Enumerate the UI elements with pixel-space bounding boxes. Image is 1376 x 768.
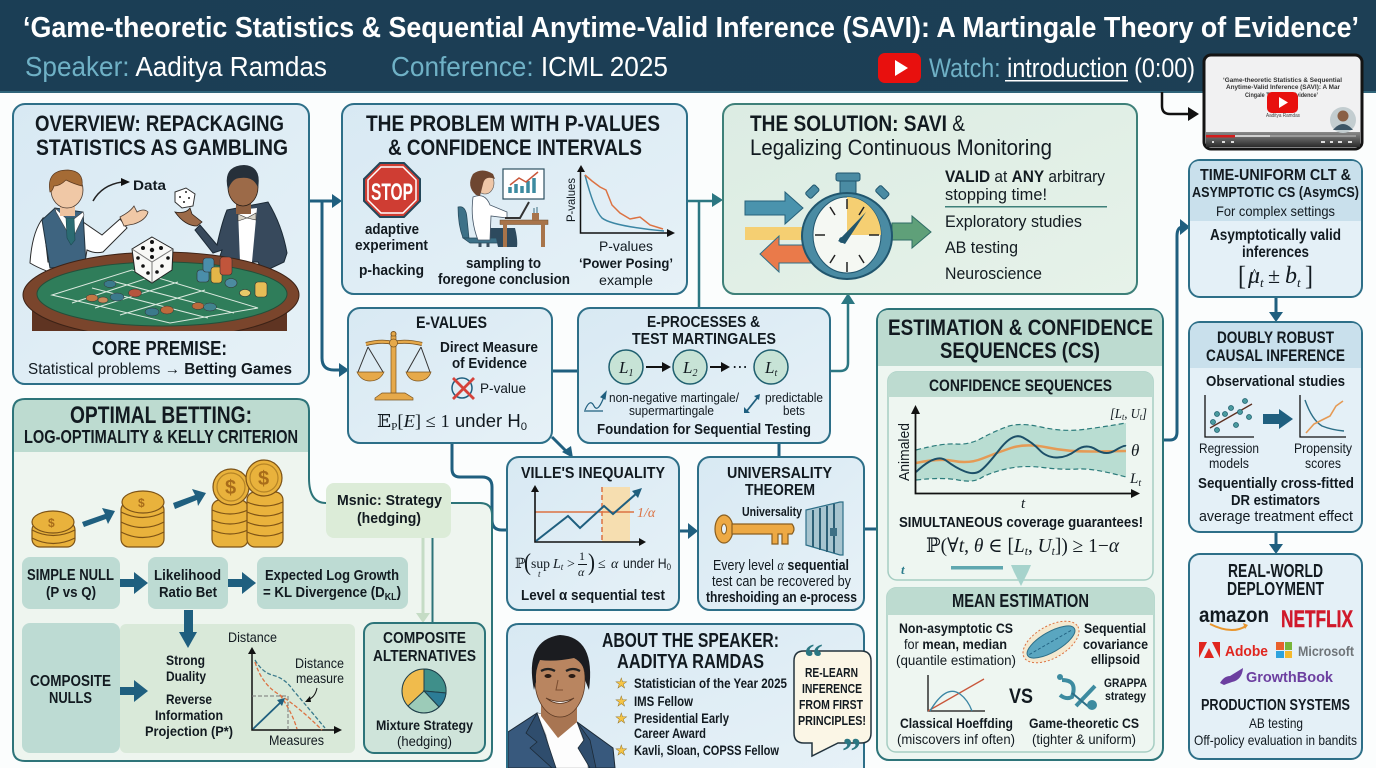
logo: growthbook: GrowthBook [1246,669,1334,686]
label: adaptive experiment: experiment [355,237,428,254]
box: composite alternatives: COMPOSITE [383,630,466,647]
callout: re-learn inference [794,637,871,768]
label: level alpha: Level α sequential test [521,587,665,604]
chart: confidence sequence: t [1138,478,1141,489]
heading: time-uniform: For complex settings [1216,203,1335,219]
formula: interval: ^ [1251,267,1258,283]
chart: propensity [1300,395,1346,437]
box: composite nulls [22,623,120,753]
arrow: to video thumbnail [1162,92,1199,121]
label: classical hoeffding: (miscovers inf often) [897,731,1015,747]
icon: stopwatch [802,173,892,279]
heading: universality [727,465,832,499]
heading: doubly robust: DOUBLY ROBUST [1217,328,1334,347]
panel: optimal betting [13,399,492,761]
connectors [309,193,1283,554]
awards list: Statistician of the Year 2025 [634,675,787,691]
chart: mixture pie [402,669,446,713]
label: grappa strategy [1104,676,1147,703]
label: propensity scores: scores [1305,455,1341,471]
heading: universality: UNIVERSALITY [727,465,832,482]
label: reverse information projection [145,691,233,739]
heading: overview: STATISTICS AS GAMBLING [36,135,288,160]
universality text: Every level α sequential [713,557,849,574]
label: foundation: Foundation for Sequential Testing [597,421,811,438]
formula: interval: ± [1268,263,1280,288]
box: composite nulls: COMPOSITE [30,673,111,690]
chart: reverse information projection: Distance [228,629,277,645]
heading: estimation [888,315,1153,363]
icon: jail gate [806,502,843,555]
universality text: threshoiding an e-process [706,589,857,606]
box: composite alternatives: Mixture Strategy [376,717,473,733]
small die [175,188,195,208]
logo: microsoft: Microsoft [1298,643,1354,659]
panel: e-processes [578,308,830,443]
icon: grappa tool [1057,674,1097,710]
heading: confidence sequences: CONFIDENCE SEQUENCES [929,376,1112,395]
icon: youtube [878,53,921,83]
panel: overview [13,104,309,384]
label: universality: Universality [742,504,803,519]
label: adaptive experiment [355,221,428,254]
icon: growing coin stacks: $ [138,496,145,510]
label: sampling to foregone conclusion: foregone conclusion [438,271,570,288]
panel: e-values [348,308,552,443]
heading: real-world: DEPLOYMENT [1227,579,1324,599]
label: p-hacking: p-hacking [359,262,424,279]
panel: time-uniform clt [1189,160,1362,297]
illustration: researcher at laptop [458,169,548,247]
subpanel: confidence sequences [888,372,1153,586]
video thumbnail: Anytime-Valid Inference (SAVI): A Mar [1226,84,1340,91]
icon: growing coin stacks: $ [225,477,236,499]
formula: e-value: 0 [521,421,527,433]
awards list: ★ [615,675,628,691]
label: dr estimators: average treatment effect [1199,508,1354,525]
video thumbnail: Aaditya Ramdas [1266,113,1300,119]
formula: interval: t [1260,275,1264,290]
heading: optimal betting [24,402,298,447]
formula: coverage: t [1025,544,1029,558]
betting table [23,252,299,338]
formula: interval [1238,261,1313,291]
chart: confidence sequence: t [1122,412,1125,422]
icon: arrows into stopwatch [745,192,931,272]
formula: e-value: [ [397,411,404,431]
heading: ville: VILLE'S INEQUALITY [521,465,665,482]
formula: ville: ≤ [598,557,606,572]
crossed out p-value: P-value [480,380,526,396]
label: power posing example: P-values [599,238,653,254]
label: game-theoretic cs: (tighter & uniform) [1032,731,1136,747]
awards list: ★ [615,742,628,758]
diagram: martingale chain: L [683,358,692,377]
label: non-asymptotic cs: (quantile estimation) [896,652,1016,668]
box: expected log growth: = KL Divergence (D [263,584,401,601]
man 2 [175,165,287,282]
heading: overview [35,111,288,160]
label: adaptive experiment: adaptive [365,221,419,238]
chart: reverse information projection [228,629,344,748]
label: non-negative martingale [609,390,739,418]
label: strong duality: Duality [166,668,206,684]
icon: stop sign: STOP [371,179,413,206]
solution text: stopping time! [945,185,1047,204]
logo: microsoft [1276,642,1354,659]
awards list: Career Award [634,725,706,741]
formula: interval: ] [1305,261,1313,291]
universality text [706,557,857,606]
speaker line: Speaker: Aaditya Ramdas [25,51,327,82]
heading: e-values: E-VALUES [416,313,487,332]
icon: covariance ellipsoid [1016,613,1086,671]
heading: real-world: REAL-WORLD [1228,561,1323,581]
formula: ville: > [567,557,575,572]
illustration: gamblers at betting table [23,165,299,338]
awards list: Kavli, Sloan, COPSS Fellow [634,742,779,758]
heading: about the speaker: ABOUT THE SPEAKER: [602,630,779,652]
arrow: regression to propensity [1263,409,1293,429]
label: direct measure of evidence [440,339,538,372]
panel: doubly robust causal inference [1189,322,1362,532]
label: dr estimators [1198,475,1354,525]
chart: reverse information projection: Distance [295,655,344,671]
label: game-theoretic cs: Game-theoretic CS [1029,715,1139,731]
icon: balance scales [357,332,431,400]
label: strong duality [166,652,206,684]
video thumbnail: ‘Game-theoretic Statistics & Sequential [1223,77,1342,84]
label: power posing example: example [599,272,653,288]
label: production systems: AB testing [1249,715,1303,731]
label: propensity scores: Propensity [1294,440,1352,456]
label: sequential covariance ellipsoid: Sequential [1084,620,1146,636]
core premise: Statistical problems → Betting Games [28,361,292,378]
heading: time-uniform: TIME-UNIFORM CLT & [1200,167,1351,184]
heading: problem: & CONFIDENCE INTERVALS [388,135,642,160]
diagram: martingale chain: 2 [692,368,697,379]
diagram: martingale chain: L [619,358,628,377]
label: classical hoeffding [897,715,1015,747]
header banner [0,0,1376,93]
heading: solution: THE SOLUTION: SAVI & [750,111,965,136]
formula: ville [515,549,671,579]
label: regression models [1199,440,1259,471]
chart: reverse information projection: Measures [269,732,324,748]
label: propensity scores [1294,440,1352,471]
solution text: Exploratory studies [945,212,1082,231]
box: expected log growth: Expected Log Growth [265,567,399,584]
formula: coverage: ℙ(∀t, θ ∈ [L [926,535,1025,557]
chart: confidence sequence: L [1130,471,1138,487]
heading: e-processes: TEST MARTINGALES [632,331,776,348]
arrow: likelihood to growth [228,572,256,594]
core premise [28,338,292,378]
box: composite alternatives [364,623,485,753]
portrait: speaker [508,635,615,768]
subpanel: mean estimation [887,588,1154,752]
awards list: ★ [615,710,628,726]
panel: the problem with p-values [342,104,687,294]
heading: solution [750,111,1052,160]
formula: ville: t [538,569,541,579]
diagram: martingale chain: ⋯ [732,359,748,376]
box: composite alternatives: (hedging) [397,733,452,749]
label: asymptotically valid: Asymptotically valid [1210,227,1341,244]
arrow: cs to mean estimation [1011,565,1031,586]
diagram: martingale chain: L [765,358,774,377]
box: likelihood ratio bet [148,557,228,609]
heading: universality: THEOREM [745,482,815,499]
logo: adobe: Adobe [1225,643,1268,660]
arrow: coin growth 1 [82,508,115,527]
heading: e-processes [632,314,776,348]
icon: key [715,515,794,544]
video thumbnail: Cingale Theory of Evidence’ [1245,92,1318,99]
chart: confidence sequence: Animaled [896,423,913,481]
chart: confidence sequence: [L [1110,407,1123,422]
label: strong duality: Strong [166,652,205,668]
callout: re-learn inference: RE-LEARN [805,665,858,680]
diagram: martingale chain: 1 [628,368,633,379]
heading: optimal betting: LOG-OPTIMALITY & KELLY CRITERION [24,427,298,447]
box: likelihood ratio bet: Ratio Bet [159,584,217,601]
heading: doubly robust [1206,328,1345,365]
universality text: test can be recovered by [712,573,851,590]
label: asymptotically valid: inferences [1242,244,1309,261]
icon: stop sign [364,163,420,217]
formula: coverage: ]) ≥ 1− [1055,535,1109,557]
panel: about the speaker [507,624,871,768]
arrow: composite nulls right [120,680,148,702]
chart: ville [531,485,656,546]
heading: problem: THE PROBLEM WITH P-VALUES [366,111,660,136]
label: vs: VS [1009,685,1033,708]
chart: p-values: P-values [564,178,578,222]
icon: predictable bets arrows [744,394,760,413]
box: expected log growth: ) [397,584,401,601]
label: sequential covariance ellipsoid: covariance [1083,636,1148,652]
label: classical hoeffding: Classical Hoeffding [900,715,1013,731]
label: sequential covariance ellipsoid: ellipsoid [1091,651,1140,667]
label: dr estimators: Sequentially cross-fitted [1198,475,1354,492]
man 1 [30,170,148,282]
chart: ville: 1/α [637,506,656,521]
chart: confidence sequence: θ [1131,441,1139,460]
heading: optimal betting: OPTIMAL BETTING: [70,402,252,429]
solution text [945,167,1107,283]
label: sampling to foregone conclusion: sampling to [466,255,541,272]
region: composite nulls detail [120,624,355,753]
label: power posing example: ‘Power Posing’ [579,255,673,271]
chart: confidence sequence: t [1140,412,1142,422]
label: observational studies: Observational studies [1206,373,1345,390]
label: predictable bets: bets [783,403,805,418]
heading: about the speaker [602,630,779,673]
label: sequential covariance ellipsoid [1083,620,1148,667]
box: expected log growth: KL [385,592,397,603]
callout: re-learn inference: PRINCIPLES! [798,713,866,728]
solution text: Neuroscience [945,264,1042,283]
big die [132,237,173,283]
heading: overview: OVERVIEW: REPACKAGING [35,111,284,136]
panel: universality theorem [698,457,864,610]
heading: problem [366,111,660,160]
heading: e-processes: E-PROCESSES & [647,314,760,331]
arrow: simple to likelihood [120,572,148,594]
formula: interval: [ [1238,261,1246,291]
awards list: Presidential Early [634,710,729,726]
label: grappa strategy: strategy [1105,689,1146,703]
label: non-asymptotic cs [896,620,1016,668]
arrow: likelihood down [179,610,197,648]
label: non-negative martingale: supermartingale [629,403,714,418]
icon: growing coin stacks: $ [48,516,55,530]
diagram: martingale chain: t [774,368,777,379]
crossed out p-value [452,378,526,399]
heading: solution: Legalizing Continuous Monitoring [750,135,1052,160]
formula: ville: 0 [667,562,671,572]
box: mixture strategy hedging: Msnic: Strategy [337,492,443,509]
formula: e-value: 𝔼 [377,411,391,431]
label: power posing example [579,238,673,288]
panel: real-world deployment [1189,554,1362,759]
formula: coverage: α [1109,535,1119,557]
panel: the solution [723,104,1137,294]
callout: re-learn inference: “ [804,637,823,679]
box: expected log growth [257,557,408,609]
solution text: VALID at ANY arbitrary [945,167,1105,186]
box: composite alternatives: ALTERNATIVES [373,648,476,665]
label: non-negative martingale: non-negative martingale/ [609,390,739,405]
chart: confidence sequence: , U [1124,407,1141,422]
chart: regression [1205,395,1254,437]
formula: ville: under H [623,555,673,571]
label: regression models: Regression [1199,440,1259,456]
label: direct measure of evidence: of Evidence [452,355,527,372]
conference line: Conference: ICML 2025 [391,51,668,82]
formula: coverage: , [1028,535,1038,557]
formula: ville: 1 [579,549,585,563]
label: reverse information projection: Projection (P*) [145,723,233,739]
label: sampling to foregone conclusion [438,255,570,288]
callout: re-learn inference: FROM FIRST [799,697,863,712]
label: regression models: models [1209,455,1249,471]
formula: coverage: U [1038,535,1053,557]
box: simple null: SIMPLE NULL [27,567,114,584]
label: grappa strategy: GRAPPA [1104,676,1147,690]
formula: interval: μ [1247,263,1260,289]
box: simple null: (P vs Q) [46,584,96,601]
heading: mean estimation: MEAN ESTIMATION [952,591,1089,611]
watch link: Watch: introduction (0:00) [929,53,1195,83]
formula: e-value: E] ≤ 1 under H [404,411,519,431]
box: likelihood ratio bet: Likelihood [154,567,221,584]
heading: about the speaker: AADITYA RAMDAS [617,651,764,673]
progress t marker [901,562,1003,577]
label: non-asymptotic cs: for mean, median [904,636,1007,652]
formula: ville: α [578,565,585,579]
awards list: IMS Fellow [634,693,693,709]
logo: amazon: amazon [1199,604,1269,627]
callout: re-learn inference: INFERENCE [802,681,862,696]
label: reverse information projection: Reverse [166,691,212,707]
arrow: coin growth 2 [173,489,206,509]
video thumbnail [1204,55,1362,149]
formula: ville: L [553,557,561,572]
connector: strategy to composite alternatives [416,538,432,623]
label: game-theoretic cs [1029,715,1139,747]
progress t marker: t [901,562,905,577]
box: composite nulls: NULLS [49,690,92,707]
label: predictable bets [765,390,823,418]
label: non-asymptotic cs: Non-asymptotic CS [899,620,1013,636]
panel: ville's inequality [507,457,679,610]
chart: reverse information projection: measure [296,670,344,686]
awards list [615,675,787,758]
heading: estimation: ESTIMATION & CONFIDENCE [888,315,1153,340]
label: simultaneous coverage: SIMULTANEOUS coverage guarantees! [899,514,1143,531]
label: direct measure of evidence: Direct Measure [440,339,538,356]
label: dr estimators: DR estimators [1231,492,1320,509]
chart: confidence sequence: t [1021,496,1026,512]
formula: ville: t [561,562,564,572]
heading: doubly robust: CAUSAL INFERENCE [1206,346,1345,365]
heading: real-world [1227,561,1324,599]
formula: interval: b [1285,263,1297,289]
logo: adobe [1199,642,1268,660]
heading: estimation: SEQUENCES (CS) [940,338,1100,363]
label: predictable bets: predictable [765,390,823,405]
arrow to data [93,178,130,201]
awards list: ★ [615,693,628,709]
chip stacks [197,257,267,297]
label: data: Data [133,177,166,193]
formula: ville: ℙ [515,557,526,572]
heading: time-uniform [1192,167,1359,219]
formula: ville: sup [531,557,550,572]
chart: confidence sequence [896,405,1147,512]
formula: ville: α [611,557,619,572]
formula: interval: t [1297,275,1301,290]
box: mixture strategy hedging: (hedging) [357,510,421,527]
diagram: martingale chain [609,350,788,384]
formula: ville: ) [588,550,595,576]
formula: ville: ( [524,550,531,576]
formula: e-value: P [391,421,397,433]
solution text: AB testing [945,238,1018,257]
core premise: CORE PREMISE: [92,338,227,360]
chart: p-values [564,165,675,237]
label: reverse information projection: Information [155,707,223,723]
label: production systems [1194,697,1357,748]
icon: growing coin stacks [32,460,283,547]
chart: confidence sequence: ] [1141,407,1147,422]
formula: coverage: t [1052,544,1056,558]
box: mixture strategy hedging [326,483,451,538]
box: simple null [22,557,120,609]
label: asymptotically valid [1210,227,1341,261]
icon: growing coin stacks: $ [258,468,269,490]
chart: hoeffding [928,675,985,711]
icon: martingale squiggle [584,392,606,411]
panel: estimation and confidence sequences [877,309,1163,760]
